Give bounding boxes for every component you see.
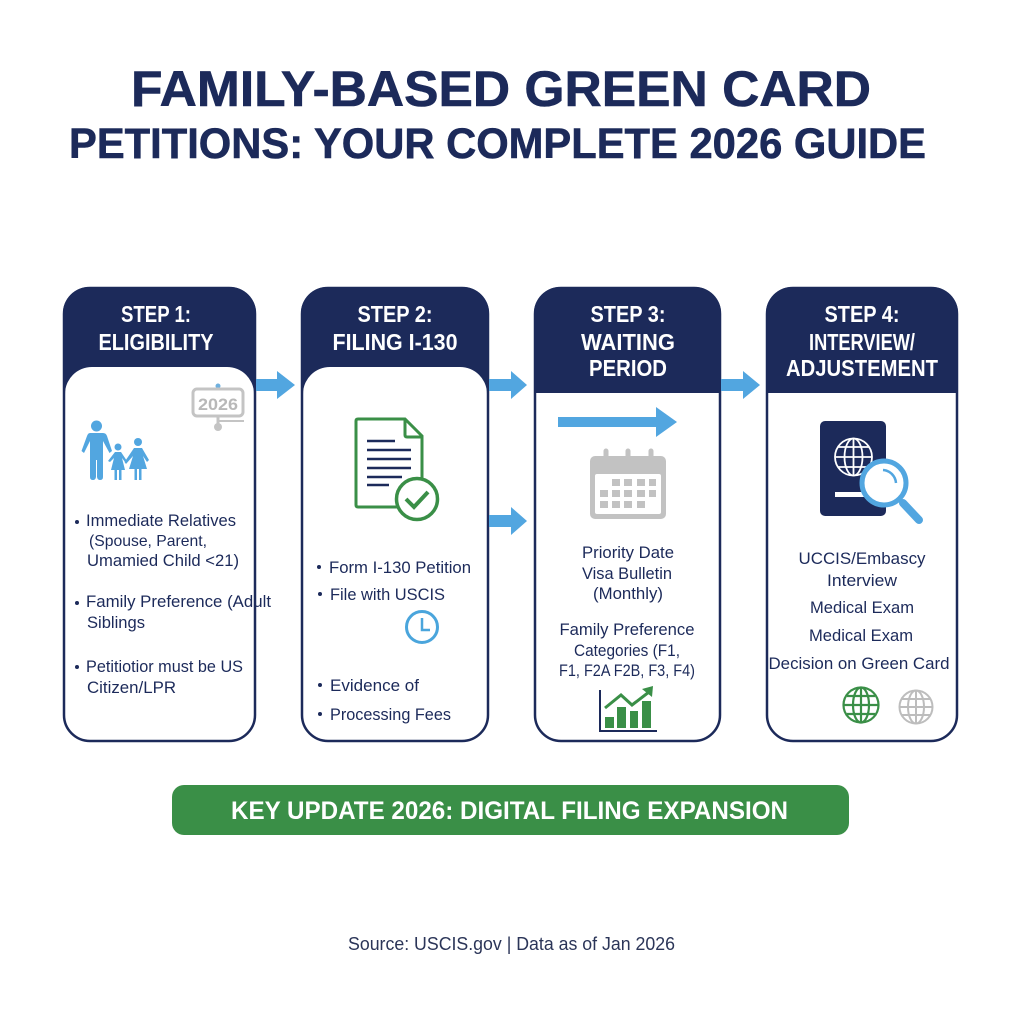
step 2 bullets: File with USCIS — [330, 585, 445, 604]
step 3 heading: PERIOD — [589, 355, 667, 381]
title: FAMILY-BASED GREEN CARD — [131, 61, 871, 117]
panel: step 1 eligibility — [63, 287, 271, 741]
step 4 text: Interview — [827, 571, 898, 590]
step 2 bullets: Processing Fees — [330, 705, 451, 724]
arrow: step 2 to step 3 lower — [489, 507, 527, 535]
icon: grey globe — [900, 690, 932, 724]
step 3 heading — [581, 301, 675, 381]
title: PETITIONS: YOUR COMPLETE 2026 GUIDE — [69, 120, 926, 168]
step 1 bullets: Petitiotior must be US — [86, 657, 243, 676]
step 2 bullets: Form I-130 Petition — [329, 558, 471, 577]
step 3 text — [559, 543, 695, 680]
step 4 text — [768, 549, 950, 673]
step 1 heading: STEP 1: — [121, 301, 191, 327]
source note: Source: USCIS.gov | Data as of Jan 2026 — [348, 934, 675, 954]
title — [69, 61, 926, 168]
step 2 bullets: Evidence of — [330, 676, 419, 695]
panel: step 4 interview — [766, 287, 958, 741]
step 1 bullets: Immediate Relatives — [86, 511, 236, 530]
step 4 text: Medical Exam — [810, 598, 914, 617]
arrow: step 3 to step 4 — [721, 371, 760, 399]
step 1 bullets: (Spouse, Parent, — [89, 533, 207, 550]
step 2 bullets — [317, 558, 471, 724]
panel: step 2 filing — [301, 287, 489, 741]
step 3 heading: WAITING — [581, 329, 675, 355]
step 3 text: Priority Date — [582, 543, 674, 562]
arrow: waiting timeline — [558, 407, 677, 437]
step 3 heading: STEP 3: — [590, 301, 666, 327]
step 3 text: F1, F2A F2B, F3, F4) — [559, 661, 695, 680]
step 4 heading — [786, 301, 938, 381]
step 3 text: Family Preference — [560, 620, 694, 639]
step 3 text: Visa Bulletin — [582, 564, 672, 583]
icon: green globe — [844, 688, 878, 722]
icon: growth chart — [600, 686, 657, 731]
banner: key update: KEY UPDATE 2026: DIGITAL FILING EXPANSION — [231, 797, 788, 825]
step 1 heading: ELIGIBILITY — [98, 329, 214, 355]
panel: step 3 waiting period — [534, 287, 721, 741]
step 1 bullets: Siblings — [87, 613, 145, 632]
arrow: step 2 to step 3 upper — [489, 371, 527, 399]
icon: calendar — [590, 451, 666, 519]
step 3 text: Categories (F1, — [574, 641, 680, 660]
arrow: step 1 to step 2 — [256, 371, 295, 399]
step 4 heading: ADJUSTEMENT — [786, 355, 938, 381]
step 4 text: Decision on Green Card — [768, 654, 950, 673]
step 1 bullets: Citizen/LPR — [87, 678, 176, 697]
step 2 heading: FILING I-130 — [332, 329, 458, 355]
icon: family — [82, 420, 149, 480]
step 1 bullets: Umamied Child <21) — [87, 551, 239, 570]
step 4 heading: STEP 4: — [824, 301, 900, 327]
step 2 heading — [332, 301, 458, 355]
step 4 text: UCCIS/Embascy — [798, 549, 926, 568]
step 4 heading: INTERVIEW/ — [809, 329, 915, 355]
step 3 text: (Monthly) — [593, 584, 663, 603]
icon: document with check — [356, 419, 438, 520]
icon: clock — [406, 612, 438, 642]
step 1 heading — [98, 301, 214, 355]
step 1 bullets: Family Preference (Adult — [86, 592, 271, 611]
step 1 bullets — [75, 511, 271, 697]
banner: key update — [172, 785, 849, 835]
icon: 2026 sign — [193, 384, 244, 431]
step 4 text: Medical Exam — [809, 626, 913, 645]
icon: 2026 sign: 2026 — [198, 395, 238, 414]
step 2 heading: STEP 2: — [358, 301, 432, 327]
icon: passport with magnifier — [820, 421, 919, 520]
